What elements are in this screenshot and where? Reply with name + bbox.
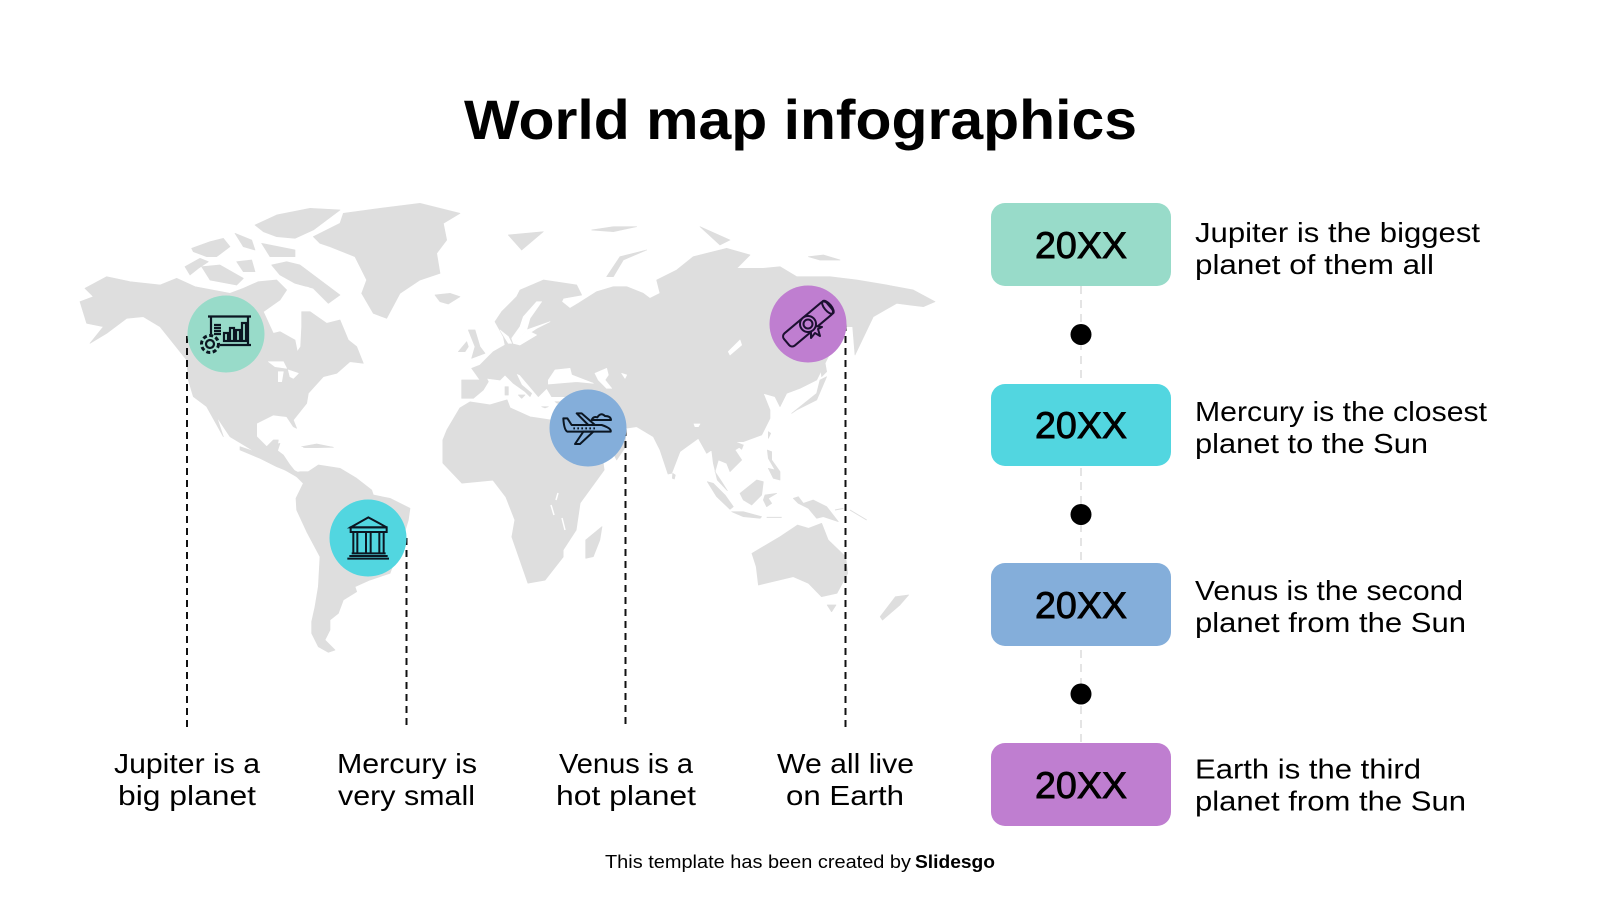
icon: airplane and cloud [563,413,611,444]
label: Jupiter: big planet [118,780,256,811]
timeline row 1 [991,203,1480,286]
label: Earth: We all live [777,748,914,779]
text: Mercury description: planet to the Sun [1195,428,1428,459]
dashed leader: Venus [624,429,626,727]
text: Venus description: planet from the Sun [1195,607,1466,638]
marker: Mercury [330,500,406,576]
text: Earth description [1195,754,1466,816]
label: Mercury: Mercury is [337,748,477,779]
footer credit: Slidesgo [915,851,995,872]
text: Earth description: planet from the Sun [1195,786,1466,816]
timeline row 4: 20XX [1035,765,1127,806]
map: Africa [443,400,604,583]
map: Great Lakes and inland water [268,287,308,382]
map: Southeast Asia islands [707,432,867,522]
label: Venus: Venus is a [559,748,694,779]
marker: Earth [770,286,846,362]
marker: Jupiter [188,296,264,372]
timeline row 2 [991,384,1487,466]
map: Central and South America [240,440,410,652]
label: Jupiter [114,748,261,811]
label: Earth [777,748,914,811]
text: Venus description: Venus is the second [1195,575,1463,606]
timeline dot 1 [1070,324,1092,345]
timeline row 2: 20XX [1035,405,1127,446]
timeline dot 3 [1070,684,1092,704]
text: Earth description: Earth is the third [1195,754,1421,784]
timeline connector [1080,286,1082,743]
dashed leader: Jupiter [186,336,188,727]
timeline dot 2 [1070,504,1092,525]
text: Venus description [1195,575,1466,638]
dashed leader: Earth [844,324,846,727]
label: Mercury [337,748,477,811]
map: Oceania and Madagascar [586,523,909,620]
map: North America and Greenland [80,203,485,482]
world map [80,203,935,652]
timeline row 3 [991,563,1466,646]
icon: classical building [347,517,389,559]
footer credit: This template has been created by [605,851,912,872]
icon: presentation board with gear [202,316,251,352]
timeline row 3: 20XX [1035,585,1127,626]
label: Earth: on Earth [786,780,904,811]
map: inland seas [500,302,742,427]
text: Jupiter description: Jupiter is the biggest [1195,217,1480,248]
timeline row 4 [991,743,1466,826]
timeline row 1: 20XX [1035,225,1127,266]
text: Mercury description [1195,396,1487,459]
label: Jupiter: Jupiter is a [114,748,261,779]
text: Mercury description: Mercury is the closest [1195,396,1487,427]
labels under the map [114,748,914,811]
text: Jupiter description [1195,217,1480,280]
title: World map infographics [464,88,1137,151]
label: Venus: hot planet [556,780,696,811]
marker: Venus [550,390,626,466]
text: Jupiter description: planet of them all [1195,249,1434,280]
label: Venus [556,748,696,811]
label: Mercury: very small [338,780,475,811]
icon: diploma scroll [781,299,836,348]
map: African lakes [551,493,565,530]
map: Eurasia [462,227,935,491]
dashed leader: Mercury [406,538,408,727]
